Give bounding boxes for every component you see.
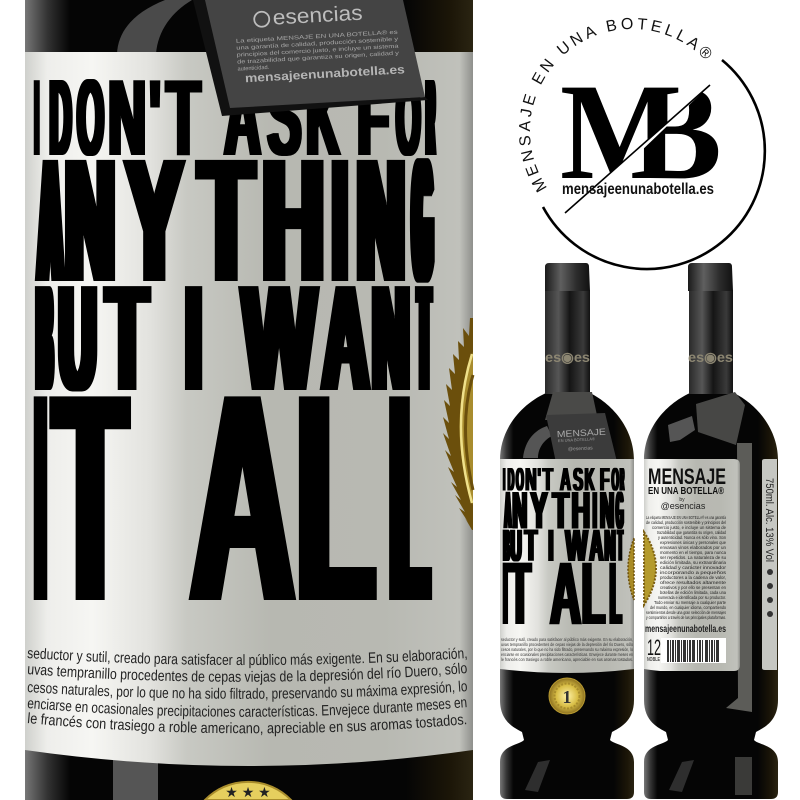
tag body text: autenticidad. xyxy=(237,65,270,73)
headline line 2: T xyxy=(199,123,254,319)
logo website: mensajeenunabotella.es xyxy=(562,181,714,198)
headline line 3: W xyxy=(242,253,316,422)
hang tag: MENSAJE xyxy=(557,427,606,439)
hang tag: @esencias xyxy=(568,445,593,453)
back label title: MENSAJE xyxy=(648,464,726,489)
description text xyxy=(501,637,633,662)
diagonal slash xyxy=(565,85,710,213)
headline line 4: T xyxy=(54,332,126,663)
barcode xyxy=(661,638,726,663)
headline message: B xyxy=(504,520,510,571)
back label body text: y autenticidad. Nunca es sólo vino. Son xyxy=(658,535,726,540)
shoulder reflections xyxy=(523,426,552,458)
headline line 1: N xyxy=(108,57,146,179)
bottle silhouette xyxy=(500,393,634,799)
circular brand name: MENSAJE EN UNA BOTELLA® xyxy=(519,18,712,192)
headline line 1: A xyxy=(224,57,261,179)
large gold medal xyxy=(205,782,291,800)
front bottle xyxy=(500,263,634,799)
hang tag xyxy=(546,413,620,477)
headline message: ' xyxy=(538,461,541,498)
headline line 4: A xyxy=(191,332,294,663)
neck band text: es◉es xyxy=(545,349,590,365)
age number: 12 xyxy=(647,635,661,660)
headline line 1: I xyxy=(36,57,38,179)
large bottle close-up xyxy=(25,0,474,800)
large bottle close-up: T xyxy=(419,253,429,422)
main white label xyxy=(25,52,473,766)
headline line 4: I xyxy=(39,332,42,663)
back label body text xyxy=(646,514,727,620)
headline message: I xyxy=(504,544,507,643)
headline line 1: D xyxy=(50,57,71,179)
back label body text: botellas de edición limitada, cada una xyxy=(660,590,726,595)
headline message: I xyxy=(593,481,597,540)
front bottle: T xyxy=(618,520,623,571)
headline message: N xyxy=(525,461,537,498)
back label xyxy=(644,459,740,671)
glass reflection: upper arc xyxy=(117,0,192,54)
shoulder highlight xyxy=(545,392,598,420)
side label xyxy=(762,459,777,670)
label description text: cesos naturales, por lo que no ha sido filtrado, preservando su máxima expresión, lo xyxy=(28,680,467,702)
side label icons xyxy=(767,569,773,617)
capsule xyxy=(688,263,733,291)
back label body text: Todo enviar su mensaje a cualquier parte xyxy=(654,600,726,605)
headline message: N xyxy=(605,520,615,571)
headline message: O xyxy=(516,461,524,498)
headline message: S xyxy=(573,461,583,498)
logo ring xyxy=(543,60,765,269)
gold seal edge xyxy=(443,318,473,530)
side label text: 750ml. Alc. 13% Vol xyxy=(763,478,775,562)
headline message: I xyxy=(548,520,553,571)
back label body text: y compartirlos a través de las principales plataformas. xyxy=(646,615,726,620)
headline line 3: N xyxy=(373,253,409,422)
headline message: N xyxy=(600,481,614,540)
headline line 2: A xyxy=(39,123,62,319)
headline message: T xyxy=(525,520,537,571)
seal on back label xyxy=(644,532,656,605)
hang tag: mensajeenunabotella.es xyxy=(565,463,612,470)
headline message: T xyxy=(543,461,553,498)
description text: uvas tempranillo procedentes de cepas viejas de la depresión del río Duero, sólo xyxy=(501,642,633,647)
headline message: K xyxy=(585,461,595,498)
tag body text: principios del comercio justo, e incluye un sistema xyxy=(237,44,400,59)
tag body text: de trazabilidad que garantiza su origen, calidad y xyxy=(237,51,399,66)
description text: cesos naturales, por lo que no ha sido filtrado, preservando su máxima expresión, lo xyxy=(501,647,633,652)
back label body text: de calidad, producción sostenible y principios del xyxy=(646,520,726,525)
back label body text: numerada e identificada por su productor. xyxy=(658,595,726,600)
back label body text: expresiones únicas y personales que xyxy=(660,540,726,545)
label xyxy=(500,459,634,673)
back label body text: sentimientos desde una gran selección de mensajes xyxy=(646,610,727,615)
back label body text: incorporando a pequeños xyxy=(660,570,727,575)
description text: seductor y sutil, creado para satisfacer al público más exigente. En su elaboración, xyxy=(501,637,633,642)
tag body text: La etiqueta MENSAJE EN UNA BOTELLA® es xyxy=(236,29,398,45)
front bottle: R xyxy=(620,461,624,498)
monogram B: B xyxy=(630,55,722,208)
back label body text: del mundo, en cualquier idioma, compartiendo xyxy=(650,605,726,610)
headline message: L xyxy=(582,544,605,643)
headline line 2: N xyxy=(65,123,115,319)
logo xyxy=(519,18,766,270)
hang tag: EN UNA BOTELLA® xyxy=(558,436,595,443)
back label body text: momento en el tiempo, para nunca xyxy=(660,550,726,555)
headline line 2: Y xyxy=(126,123,183,319)
headline message: I xyxy=(503,461,505,498)
back label body text: calidad y carácter innovador xyxy=(660,565,727,570)
back label body text: trazabilidad que garantiza su origen, calidad xyxy=(657,530,726,535)
back label body text: edición limitada, su extraordinaria xyxy=(660,560,726,565)
back label body text: ser repetidos. La naturaleza de su xyxy=(660,555,726,560)
headline line 2: N xyxy=(357,123,404,319)
glass reflection: lower band xyxy=(113,750,158,800)
headline line 1: T xyxy=(166,57,200,179)
base reflection xyxy=(669,760,694,792)
text: G xyxy=(414,123,431,319)
headline line 3: I xyxy=(186,253,202,422)
back label body text: ofrece resultados altamente xyxy=(660,580,727,585)
headline line 3: A xyxy=(322,253,368,422)
side reflection band xyxy=(726,443,752,712)
headline message: A xyxy=(550,544,581,643)
tag body text: una garantía de calidad, producción sostenible y xyxy=(236,37,399,52)
label description text: le francés con trasiego a roble americano, apreciable en sus aromas tostados. xyxy=(28,712,466,736)
headline line 3: U xyxy=(59,253,96,422)
description text: le francés con trasiego a roble americano, apreciable en sus aromas tostados. xyxy=(501,657,633,662)
headline message: A xyxy=(560,461,571,498)
headline message: W xyxy=(566,520,588,571)
headline line 1: O xyxy=(77,57,104,179)
headline message: U xyxy=(511,520,522,571)
base reflection xyxy=(525,760,550,792)
tag brand name: esencias xyxy=(272,2,363,30)
by esencias: @esencias xyxy=(661,501,706,511)
headline line 2: H xyxy=(262,123,324,319)
label description text xyxy=(28,648,467,736)
tag website: mensajeenunabotella.es xyxy=(245,62,406,85)
headline line 2: I xyxy=(334,123,346,319)
label description text: uvas tempranillo procedentes de cepas viejas de la depresión del río Duero, sólo xyxy=(28,662,467,685)
headline line 1: K xyxy=(306,57,340,179)
headline message xyxy=(36,57,435,663)
large bottle close-up: O xyxy=(396,57,420,179)
headline line 3: B xyxy=(38,253,51,422)
headline line 1: ' xyxy=(150,57,160,179)
headline message: A xyxy=(504,481,511,540)
headline message: T xyxy=(552,481,569,540)
text: L xyxy=(391,332,428,663)
label description text: seductor y sutil, creado para satisfacer al público más exigente. En su elaboración, xyxy=(28,648,467,668)
headline message xyxy=(503,460,624,643)
headline message: T xyxy=(509,544,531,643)
bottle silhouette xyxy=(644,393,778,799)
headline message: A xyxy=(590,520,603,571)
seal edge xyxy=(628,538,634,600)
headline message: D xyxy=(508,461,514,498)
hang tag xyxy=(193,0,428,116)
text: L xyxy=(610,544,621,643)
shoulder reflection xyxy=(696,392,745,445)
label description text: enciarse en ocasionales precipitaciones características. Envejece durante meses en xyxy=(28,698,467,720)
headline message: H xyxy=(571,481,590,540)
headline line 3: T xyxy=(106,253,148,422)
gold medal: 1 xyxy=(562,687,572,707)
headline line 4: L xyxy=(296,332,375,663)
neck xyxy=(689,290,733,394)
tag brand logo xyxy=(254,11,270,27)
base highlight xyxy=(735,757,752,795)
age caption: NOBLE xyxy=(647,657,660,663)
back label body text: productores a la cadena de valor, xyxy=(660,575,726,580)
description text: enciarse en ocasionales precipitaciones características. Envejece durante meses en xyxy=(501,652,633,657)
front bottle: O xyxy=(612,461,619,498)
back label body text: La etiqueta MENSAJE EN UNA BOTELLA® es una garantía xyxy=(646,514,726,520)
monogram M: M xyxy=(560,55,682,208)
capsule xyxy=(545,263,590,291)
glass window reflection xyxy=(668,416,695,442)
tag body text xyxy=(236,29,401,73)
neck band text: es◉es xyxy=(688,349,733,365)
headline message: Y xyxy=(531,481,548,540)
gold medal xyxy=(549,678,585,714)
bottle glass body xyxy=(25,0,473,800)
back label subtitle: EN UNA BOTELLA® xyxy=(648,485,724,497)
headline message: F xyxy=(600,461,610,498)
text: G xyxy=(616,481,623,540)
headline line 1: F xyxy=(357,57,389,179)
neck xyxy=(545,290,590,394)
headline line 1: S xyxy=(268,57,301,179)
back label body text: comercio justo, e incluye un sistema de xyxy=(652,525,726,530)
back label body text: envasan vinos elaborados por un xyxy=(660,545,726,550)
back bottle xyxy=(644,263,778,799)
back label body text: creativos y por ello se presentan en xyxy=(660,585,726,590)
headline message: N xyxy=(512,481,527,540)
large gold medal: ★ ★ ★ xyxy=(225,784,271,800)
by esencias: by xyxy=(679,497,685,503)
large bottle close-up: R xyxy=(427,57,434,179)
back label website: mensajeenunabotella.es xyxy=(645,624,726,635)
